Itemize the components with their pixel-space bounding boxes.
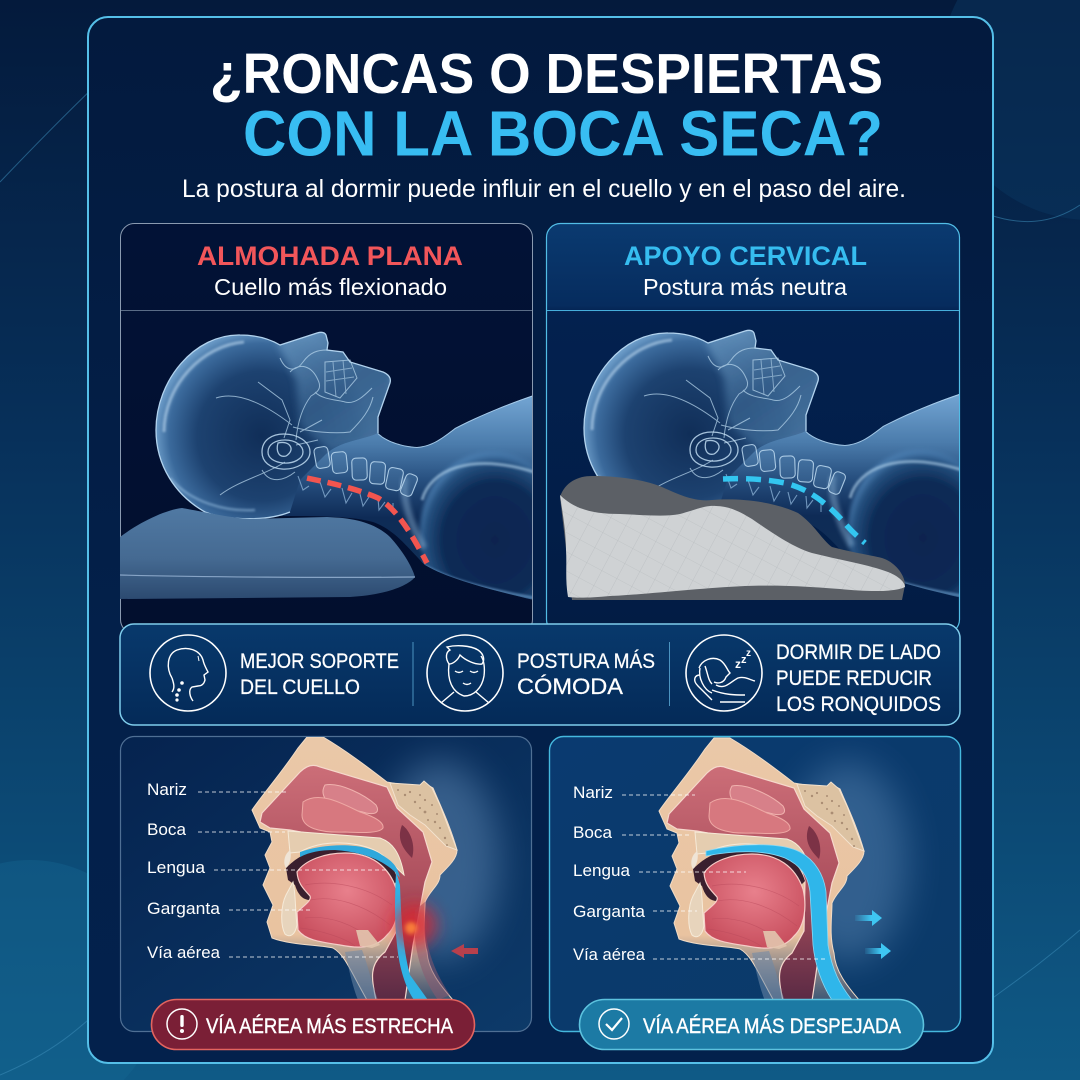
icon: side sleeper	[686, 635, 762, 711]
badge: narrower airway	[152, 1000, 474, 1050]
illustration: head on cervical pillow	[560, 330, 959, 600]
arrow: pressing in	[451, 944, 478, 958]
title	[210, 42, 883, 170]
icon: side sleeper: z	[741, 654, 747, 666]
text: dormir de lado: PUEDE REDUCIR	[776, 667, 932, 690]
labels: Vía aérea	[573, 945, 646, 964]
icon: side sleeper: z	[735, 657, 741, 671]
icon: check	[599, 1009, 629, 1039]
labels: Lengua	[573, 861, 631, 880]
highlight: obstruction glow	[393, 903, 437, 947]
labels: Lengua	[147, 858, 206, 877]
text: mejor soporte: MEJOR SOPORTE	[240, 650, 399, 673]
badge: narrower airway: VÍA AÉREA MÁS ESTRECHA	[206, 1013, 454, 1038]
labels: Vía aérea	[147, 943, 221, 962]
spine curve: blue dashed	[723, 479, 865, 543]
icon: calm face	[427, 635, 503, 711]
labels: Garganta	[573, 902, 646, 921]
text: postura cómoda	[517, 650, 655, 699]
text: mejor soporte	[240, 650, 399, 699]
labels: Boca	[147, 820, 187, 839]
text: postura cómoda: CÓMODA	[517, 674, 623, 699]
labels: Nariz	[573, 783, 613, 802]
labels	[573, 783, 646, 964]
spine curve: red dashed	[307, 478, 427, 563]
labels: Boca	[573, 823, 613, 842]
text: dormir de lado	[776, 641, 941, 716]
anatomy: throat cross-section open	[659, 738, 908, 1001]
heading: almohada plana: ALMOHADA PLANA	[197, 241, 463, 271]
subheading: postura neutra: Postura más neutra	[643, 274, 848, 300]
heading: apoyo cervical: APOYO CERVICAL	[624, 241, 867, 271]
labels: Nariz	[147, 780, 187, 799]
arrows: open airflow	[855, 910, 891, 959]
anatomy: throat cross-section narrow	[252, 737, 500, 1000]
illustration: head on flat pillow	[120, 332, 532, 600]
badge: clearer airway: VÍA AÉREA MÁS DESPEJADA	[643, 1013, 902, 1038]
panel: almohada plana	[120, 224, 564, 634]
label lines	[198, 792, 398, 957]
badge: clearer airway	[580, 1000, 924, 1050]
icon: side sleeper: z	[746, 648, 751, 659]
icon: neck profile	[150, 635, 226, 711]
cervical pillow	[560, 476, 905, 600]
text: mejor soporte: DEL CUELLO	[240, 676, 360, 699]
subtitle: La postura al dormir puede influir en el cuello y en el paso del aire.	[182, 175, 906, 203]
label lines	[622, 795, 826, 959]
labels: Garganta	[147, 899, 221, 918]
title: CON LA BOCA SECA?	[243, 98, 883, 170]
labels	[147, 780, 221, 962]
title: ¿RONCAS O DESPIERTAS	[210, 42, 883, 106]
text: postura cómoda: POSTURA MÁS	[517, 650, 655, 673]
text: dormir de lado: LOS RONQUIDOS	[776, 693, 941, 716]
text: dormir de lado: DORMIR DE LADO	[776, 641, 941, 664]
benefits strip	[120, 624, 960, 725]
panel: narrow airway	[120, 736, 532, 1032]
icon: warning	[167, 1009, 197, 1039]
panel: clear airway	[550, 736, 960, 1032]
subheading: cuello flexionado: Cuello más flexionado	[214, 274, 447, 300]
panel: apoyo cervical	[546, 224, 992, 634]
